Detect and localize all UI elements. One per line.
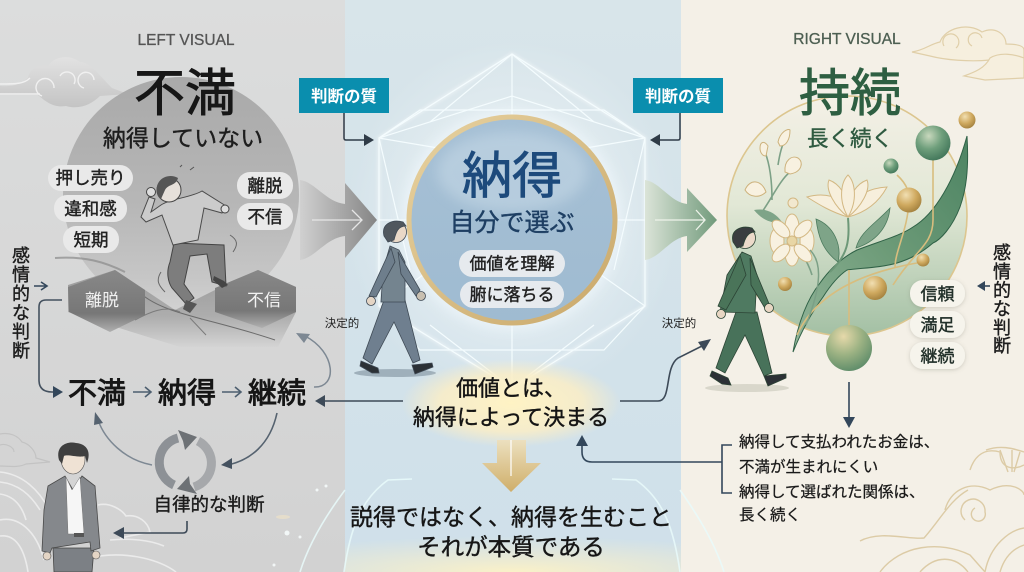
tag: 判断の質 left [299, 78, 389, 113]
left branch blossoms [762, 140, 812, 275]
pill: 押し売り: 押し売り [56, 168, 126, 188]
heading: 納得: 納得 [462, 148, 562, 204]
illustration: right circle with flowers [727, 96, 976, 371]
gold vines [797, 160, 933, 335]
pill: 押し売り [48, 165, 133, 191]
daisy blossom [769, 214, 815, 266]
flow: 不満 納得 継続: 不満 [68, 378, 126, 410]
vertical label: 感情的な判断 left: 的 [12, 284, 30, 304]
person: standing front [42, 443, 100, 572]
spheres [788, 198, 798, 208]
decoration: cloud top right [912, 27, 1024, 80]
vertical label: 感情的な判断 right: 感 [993, 243, 1011, 263]
tag: 判断の質 right [633, 78, 723, 113]
bracket and arrow to callout [576, 435, 732, 493]
panel tag: 離脱 rock [68, 270, 145, 332]
icon: cycle [159, 430, 211, 494]
conclusion text: それが本質である [417, 534, 605, 560]
pill: 満足: 満足 [920, 316, 954, 335]
vertical label: 感情的な判断 left: な [12, 303, 30, 323]
panel tag: 不信 rock [215, 270, 296, 328]
decoration: waves bottom right [860, 447, 1024, 572]
vertical label: 感情的な判断 right: 的 [993, 280, 1011, 300]
big leaf [793, 136, 968, 352]
decoration: wave pattern lower left [0, 472, 176, 572]
subheading: 自分で選ぶ: 自分で選ぶ [449, 209, 575, 237]
center circle [402, 110, 622, 330]
vertical label: 感情的な判断 right: 断 [993, 336, 1011, 356]
panel: right background [681, 0, 1024, 572]
pill: 不信 [237, 203, 293, 230]
center hexagon network [379, 54, 645, 388]
arrow: callout to right walker [620, 339, 711, 401]
arrow: tag right to hexagon [650, 113, 680, 146]
panel tag: 離脱 rock: 離脱 [85, 291, 119, 310]
label: 決定的 right: 決定的 [662, 316, 696, 330]
heading: 不満: 不満 [134, 65, 236, 122]
label: RIGHT VISUAL: RIGHT VISUAL [793, 31, 901, 48]
notes text: 納得して支払われたお金は、 [739, 433, 939, 451]
flow: 不満 納得 継続 [68, 377, 306, 410]
big arrow: green [645, 180, 717, 260]
panel: center callout: 価値とは、 [456, 376, 566, 401]
pill: 価値を理解 [459, 250, 565, 277]
notes text: 不満が生まれにくい [739, 458, 878, 476]
vertical label: 感情的な判断 left: 感 [12, 246, 30, 266]
pill: 腑に落ちる: 腑に落ちる [470, 286, 554, 304]
lotus flower [807, 175, 887, 217]
panel: left background [0, 0, 345, 572]
arrow: flow down to cycle [221, 413, 277, 469]
pill: 腑に落ちる [460, 281, 564, 308]
panel tag: 不信 rock: 不信 [247, 291, 281, 310]
pill: 短期: 短期 [74, 230, 108, 250]
panel: center callout [401, 359, 621, 447]
pill: 違和感 [54, 195, 127, 222]
vertical label: 感情的な判断 left: 情 [12, 265, 30, 285]
pill: 離脱: 離脱 [248, 176, 282, 196]
arrow: to person [113, 521, 187, 539]
notes text: 納得して選ばれた関係は、 [739, 483, 925, 501]
decoration: cloud top left [0, 57, 128, 107]
arrow: gold down [482, 440, 541, 492]
pill: 継続: 継続 [920, 347, 954, 366]
label: LEFT VISUAL: LEFT VISUAL [137, 32, 235, 49]
icon: falling person [141, 165, 236, 313]
vertical label: 感情的な判断 right: な [993, 299, 1011, 319]
pill: 違和感: 違和感 [64, 199, 117, 219]
arrow: left emotion arrow [34, 282, 47, 290]
pill: 信頼: 信頼 [920, 285, 954, 304]
arrow: cycle back to flow [94, 412, 152, 465]
heading: 持続: 持続 [799, 65, 901, 122]
pill: 継続 [910, 342, 965, 369]
tag: 判断の質 left: 判断の質 [311, 87, 377, 106]
arrow: right emotion arrow [977, 281, 990, 291]
pill: 信頼 [910, 280, 965, 307]
pill: 短期 [63, 226, 119, 253]
subheading: 納得していない: 納得していない [103, 125, 263, 151]
vertical label: 感情的な判断 left: 断 [12, 341, 30, 361]
person: center walker [354, 221, 436, 377]
label: 自律的な判断: 自律的な判断 [153, 494, 265, 515]
arrow: rock to flow [39, 300, 63, 398]
tag: 判断の質 right: 判断の質 [645, 87, 711, 106]
pill: 不信: 不信 [248, 207, 282, 227]
panel: center callout: 納得によって決まる [413, 405, 609, 430]
vertical label: 感情的な判断 right: 判 [993, 318, 1011, 338]
decoration: cloud lower left [0, 433, 50, 466]
panel: center background [344, 0, 681, 572]
notes text [739, 433, 939, 524]
pill: 価値を理解: 価値を理解 [470, 254, 554, 274]
subheading: 長く続く: 長く続く [807, 127, 893, 151]
decoration: bottom glow arcs [300, 479, 724, 572]
decoration: sparkles [272, 484, 328, 566]
conclusion text: 説得ではなく、納得を生むこと [350, 504, 672, 530]
big arrow: gray [300, 180, 377, 260]
arrow: tag left to hexagon [344, 113, 374, 146]
vertical label: 感情的な判断 left: 判 [12, 322, 30, 342]
big circle: left [63, 77, 299, 313]
vertical label: 感情的な判断 right: 情 [993, 262, 1011, 282]
arrow: flow up to rock [296, 333, 330, 387]
conclusion text [350, 504, 672, 560]
pill: 離脱 [237, 172, 293, 199]
stem and leaves [830, 218, 849, 272]
mountain rocks [55, 258, 296, 347]
pill: 満足 [910, 311, 965, 338]
notes text: 長く続く [739, 506, 801, 524]
arrow: callout to flow [315, 395, 403, 407]
arrow: down to notes [843, 382, 855, 428]
flow: 不満 納得 継続: 継続 [248, 377, 306, 410]
label: 決定的 left: 決定的 [325, 316, 359, 330]
flow: 不満 納得 継続: 納得 [158, 377, 216, 410]
person: right walker [705, 227, 789, 392]
